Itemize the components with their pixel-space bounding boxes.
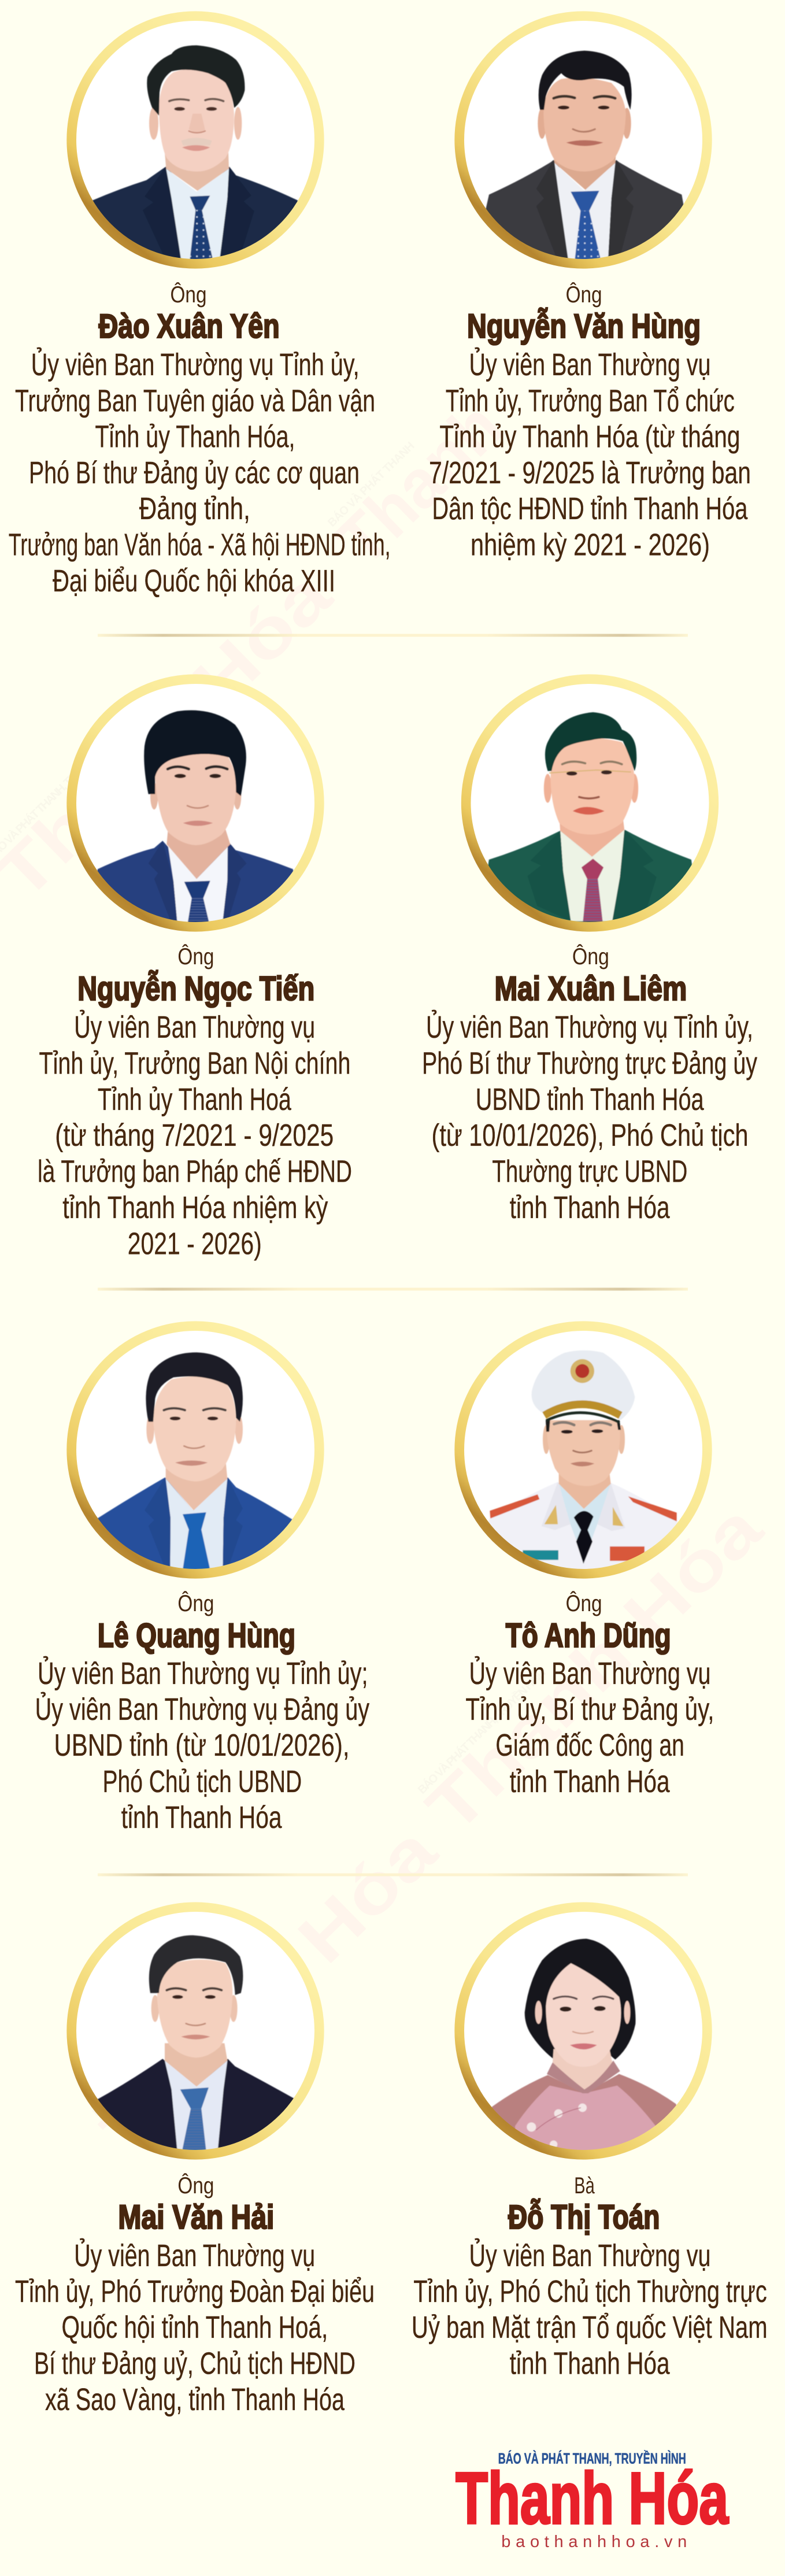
role text: Tỉnh ủy, Phó Trưởng Đoàn Đại biểu (15, 2274, 375, 2309)
role text: tỉnh Thanh Hóa nhiệm kỳ (62, 1190, 328, 1225)
honorific: Ông (177, 2172, 214, 2199)
role text: Đại biểu Quốc hội khóa XIII (53, 564, 335, 598)
panel: Lê Quang Hùng (35, 1326, 369, 1835)
honorific: Ông (566, 282, 602, 308)
role text: UBND tỉnh (từ 10/01/2026), (54, 1728, 349, 1763)
portrait: Mai Xuân Liêm (466, 679, 714, 939)
portrait: Nguyễn Ngọc Tiến (72, 679, 319, 939)
role text (465, 1656, 714, 1799)
panel: Tô Anh Dũng (460, 1326, 714, 1799)
role text: (từ tháng 7/2021 - 9/2025 (55, 1118, 334, 1153)
role text: Tỉnh ủy, Trưởng Ban Nội chính (39, 1046, 350, 1081)
role text: tỉnh Thanh Hóa (510, 1764, 670, 1799)
role text: Ủy viên Ban Thường vụ Đảng ủy (35, 1692, 369, 1727)
role text: Tỉnh ủy Thanh Hóa, (95, 420, 295, 454)
role text: 2021 - 2026) (128, 1227, 262, 1261)
role text: UBND tỉnh Thanh Hóa (476, 1082, 704, 1117)
role text: tỉnh Thanh Hóa (510, 1190, 670, 1225)
honorific: Ông (177, 943, 214, 969)
portrait: Đào Xuân Yên (72, 16, 319, 276)
role text: Ủy viên Ban Thường vụ (74, 2238, 315, 2273)
role text: Phó Chủ tịch UBND (103, 1764, 302, 1799)
role text: xã Sao Vàng, tỉnh Thanh Hóa (45, 2382, 345, 2417)
role text: Giám đốc Công an (495, 1728, 684, 1763)
panel: Đỗ Thị Toán (412, 1907, 768, 2381)
honorific: Ông (566, 1590, 602, 1616)
name: Đào Xuân Yên (99, 308, 280, 345)
name: Tô Anh Dũng (506, 1617, 671, 1655)
honorific: Bà (574, 2173, 595, 2199)
role text: Đảng tỉnh, (139, 491, 250, 526)
role text: Trưởng ban Văn hóa - Xã hội HĐND tỉnh, (9, 527, 391, 562)
role text: Ủy viên Ban Thường vụ (74, 1010, 315, 1045)
watermark: Thanh Hóa fourth row: Thanh Hóa (87, 1811, 451, 2170)
portrait: Lê Quang Hùng (72, 1326, 319, 1586)
role text: là Trưởng ban Pháp chế HĐND (38, 1154, 352, 1189)
watermark: Thanh Hóa third row: Thanh Hóa (412, 1489, 777, 1848)
logo website: baothanhhoa.vn (501, 2533, 687, 2551)
watermark: Thanh Hóa first row: Thanh (322, 387, 516, 580)
role text: tỉnh Thanh Hóa (121, 1800, 282, 1835)
name: Mai Văn Hải (118, 2199, 274, 2236)
honorific: Ông (572, 943, 609, 969)
role text (38, 1010, 352, 1261)
role text (429, 347, 751, 562)
name: Lê Quang Hùng (98, 1617, 295, 1655)
name: Nguyễn Ngọc Tiến (77, 970, 314, 1008)
role text: Quốc hội tỉnh Thanh Hoá, (61, 2310, 328, 2345)
honorific: Ông (177, 1590, 214, 1616)
role text: tỉnh Thanh Hóa (510, 2346, 670, 2381)
honorific: Ông (170, 282, 207, 308)
panel: Mai Văn Hải (15, 1907, 375, 2417)
portrait: Tô Anh Dũng (460, 1326, 707, 1582)
role text (422, 1010, 757, 1225)
watermark: Thanh Hóa fourth row: BÁO VÀ PHÁT THANH, TRUYỀN HÌNH (90, 1989, 223, 2119)
name: Mai Xuân Liêm (495, 970, 687, 1008)
logo tagline: BÁO VÀ PHÁT THANH, TRUYỀN HÌNH (498, 2450, 686, 2467)
watermark: Thanh Hóa third row: BÁO VÀ PHÁT THANH, TRUYỀN HÌNH (415, 1666, 549, 1797)
role text: Phó Bí thư Đảng ủy các cơ quan (29, 456, 360, 490)
watermark: Thanh Hóa first row: BÁO VÀ PHÁT THANH (325, 439, 417, 530)
role text (9, 347, 391, 598)
name: Đỗ Thị Toán (508, 2199, 660, 2236)
role text: Ủy viên Ban Thường vụ Tỉnh ủy, (31, 347, 360, 382)
panel: Đào Xuân Yên (9, 16, 391, 598)
role text (412, 2238, 768, 2381)
role text: Tỉnh ủy Thanh Hoá (98, 1082, 292, 1117)
role text (15, 2238, 375, 2417)
panel: Mai Xuân Liêm (422, 679, 757, 1225)
role text: Ủy viên Ban Thường vụ Tỉnh ủy; (38, 1656, 368, 1691)
role text: Trưởng Ban Tuyên giáo và Dân vận (15, 384, 375, 419)
panel: Nguyễn Văn Hùng (429, 16, 751, 562)
portrait: Đỗ Thị Toán (460, 1907, 707, 2167)
role text (35, 1656, 369, 1835)
role text: nhiệm kỳ 2021 - 2026) (471, 527, 710, 562)
role text: Bí thư Đảng uỷ, Chủ tịch HĐND (34, 2346, 356, 2381)
name: Nguyễn Văn Hùng (467, 308, 701, 345)
portrait: Nguyễn Văn Hùng (460, 16, 707, 276)
role text: Thường trực UBND (492, 1154, 687, 1189)
panel: Nguyễn Ngọc Tiến (38, 679, 352, 1261)
logo: Báo và Phát thanh, Truyền hình Thanh Hóa (456, 2450, 729, 2551)
portrait: Mai Văn Hải (72, 1907, 319, 2167)
